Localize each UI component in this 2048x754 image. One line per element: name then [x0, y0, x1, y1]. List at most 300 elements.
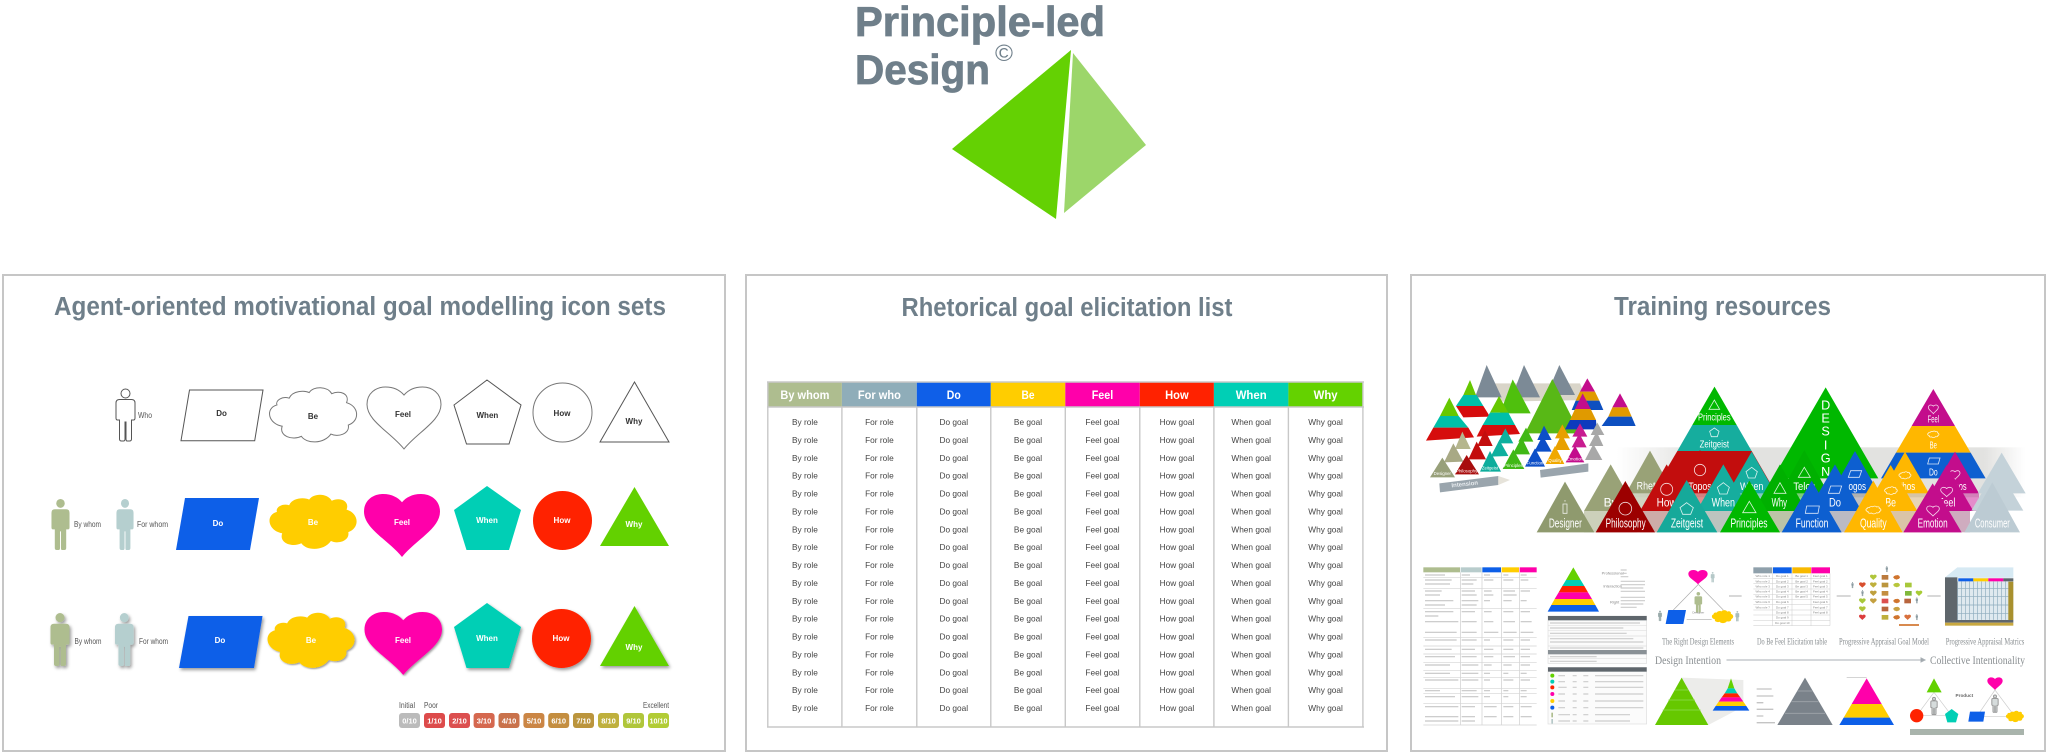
table body: Be goal	[1014, 685, 1042, 695]
front row pyramids: Principles	[1730, 516, 1768, 531]
appraisal scale legend: Initial	[399, 701, 415, 710]
thumbnail: do be feel pyramid	[1839, 677, 1894, 725]
table body: When goal	[1231, 632, 1271, 642]
table body: When goal	[1231, 488, 1271, 498]
table body: Feel goal	[1085, 632, 1120, 642]
table body: Do goal	[939, 506, 968, 516]
outline icon row: Feel	[395, 410, 411, 419]
thumbnail: do be feel table: Feel goal 4	[1813, 590, 1828, 594]
table body: How goal	[1160, 488, 1194, 498]
table body: How goal	[1160, 685, 1194, 695]
table body: By role	[792, 560, 818, 570]
thumbnail: do be feel table: Feel goal 5	[1813, 595, 1828, 599]
front mini row: Emotion	[1567, 456, 1584, 461]
shadowed colour icon row: For whom	[139, 637, 168, 646]
table body: For role	[865, 649, 894, 659]
backdrop	[1493, 383, 1587, 402]
table body: When goal	[1231, 417, 1271, 427]
big pyramid: design: E	[1821, 412, 1830, 426]
ground shadow	[1617, 447, 2025, 497]
front mini row: Designer	[1434, 471, 1452, 476]
table body: When goal	[1231, 614, 1271, 624]
table body: By role	[792, 703, 818, 713]
table body: Feel goal	[1085, 488, 1120, 498]
intension label bar	[1439, 476, 1510, 492]
front row pyramids: Quality	[1860, 516, 1887, 531]
table header row: How	[1165, 388, 1189, 402]
outline icon row	[116, 380, 669, 449]
table body: Why goal	[1308, 596, 1343, 606]
flat colour icon row: Feel	[394, 518, 410, 527]
table body: Do goal	[939, 488, 968, 498]
floor tints behind front row	[1584, 511, 1970, 532]
big pyramid: design: S	[1821, 425, 1830, 439]
table body: When goal	[1231, 560, 1271, 570]
front mini row: Philosophy	[1456, 468, 1478, 473]
big pyramid: principles zeitgeist topos: Zeitgeist	[1700, 439, 1729, 450]
table body: Feel goal	[1085, 667, 1120, 677]
thumbnail: do be feel table: Do goal 5	[1776, 595, 1789, 599]
table body: Why goal	[1308, 435, 1343, 445]
table body: For role	[865, 542, 894, 552]
table body: Be goal	[1014, 488, 1042, 498]
logo: Principle-led Design	[855, 0, 1146, 219]
table body: Be goal	[1014, 524, 1042, 534]
table header row: By whom	[780, 388, 829, 402]
table body: How goal	[1160, 667, 1194, 677]
front mini row: Function	[1527, 461, 1544, 466]
thumbnail: do be feel table: Do goal 10	[1775, 621, 1790, 625]
logo wordmark	[855, 0, 1105, 93]
front mini row: Quality	[1548, 458, 1563, 463]
table body: For role	[865, 632, 894, 642]
back row pyramids: Telos	[1793, 481, 1816, 493]
table body: For role	[865, 667, 894, 677]
table body: When goal	[1231, 506, 1271, 516]
shadowed colour icon row: Why	[626, 643, 643, 652]
table body: For role	[865, 685, 894, 695]
thumbnail: do be feel table: Feel goal 3	[1813, 584, 1828, 588]
big pyramid: principles zeitgeist topos: Principles	[1698, 413, 1731, 424]
table body: Feel goal	[1085, 649, 1120, 659]
table body: Why goal	[1308, 685, 1343, 695]
table body: By role	[792, 667, 818, 677]
table body: When goal	[1231, 542, 1271, 552]
big pyramid: design	[1773, 387, 1878, 479]
table body: Why goal	[1308, 560, 1343, 570]
table body: Why goal	[1308, 578, 1343, 588]
table body: When goal	[1231, 435, 1271, 445]
label: collective intentionality: Collective Intentionality	[1930, 653, 2025, 667]
big pyramid: design: N	[1821, 465, 1830, 479]
front row pyramids: Emotion	[1918, 516, 1948, 531]
flat colour icon row: Be	[308, 518, 319, 527]
thumbnail: do be feel table: Do goal 7	[1776, 605, 1789, 609]
table body: For role	[865, 596, 894, 606]
back row pyramids: Ethos	[1895, 481, 1916, 493]
thumbnail: do be feel table	[1753, 567, 1830, 626]
table header row: For who	[858, 388, 901, 402]
table body: Why goal	[1308, 417, 1343, 427]
flat colour icon row: When	[476, 516, 498, 525]
triad cloud and consumer	[1712, 610, 1739, 623]
table body: By role	[792, 614, 818, 624]
table body: Why goal	[1308, 614, 1343, 624]
thumbnail: goal model	[1851, 566, 1922, 626]
table body: By role	[792, 632, 818, 642]
big pyramid: feel be do: Be	[1930, 441, 1937, 452]
front mini row: Principles	[1504, 463, 1523, 468]
table body: Feel goal	[1085, 471, 1120, 481]
table body: When goal	[1231, 685, 1271, 695]
table body: Do goal	[939, 649, 968, 659]
thumbnail: right design elements triad	[1658, 570, 1723, 624]
magenta yellow blue pyramids	[1565, 378, 1636, 429]
thumbnail: do be feel table: Be goal 4	[1795, 590, 1808, 594]
table body: Do goal	[939, 417, 968, 427]
front row pyramids: Philosophy	[1606, 516, 1646, 531]
thumbnail: definitions table	[1548, 616, 1647, 663]
big pyramid: design: G	[1821, 452, 1831, 466]
back row pyramids: Topos	[1688, 481, 1712, 493]
table body: Why goal	[1308, 542, 1343, 552]
thumbnail: do be feel table: Do goal 8	[1776, 610, 1789, 614]
table body: Be goal	[1014, 578, 1042, 588]
front mini row	[1430, 444, 1602, 477]
table body: For role	[865, 417, 894, 427]
thumbnail: do be feel table: Do goal 6	[1776, 600, 1789, 604]
table body: By role	[792, 453, 818, 463]
thumbnail: do be feel table: Be goal 5	[1795, 595, 1808, 599]
logo wordmark: Design	[855, 46, 990, 93]
table body: By role	[792, 471, 818, 481]
table body: For role	[865, 471, 894, 481]
thumbnail: layered pyramid diagram: Right	[1610, 599, 1620, 604]
front row pyramids	[1537, 480, 2020, 532]
middle row pyramids: By	[1604, 496, 1618, 510]
panel heading: elicitation list: Rhetorical goal elicitation list	[902, 294, 1233, 322]
grey back pyramids	[1475, 365, 1575, 397]
thumbnail: progressive appraisal matrix	[1945, 567, 2013, 626]
thumbnail: do be feel table: Who role 5	[1755, 595, 1770, 599]
back row pyramids: Logos	[1844, 481, 1866, 493]
table body: How goal	[1160, 453, 1194, 463]
training thumbnails right column	[1712, 566, 2024, 735]
table body: Be goal	[1014, 471, 1042, 481]
flat colour icon row: Why	[626, 520, 643, 529]
table body: Feel goal	[1085, 614, 1120, 624]
table body: By role	[792, 488, 818, 498]
logo wordmark: ©	[995, 40, 1013, 66]
thumbnail: layered pyramid diagram: Professional	[1602, 571, 1624, 576]
outline icon row: When	[477, 411, 498, 420]
table body: By role	[792, 524, 818, 534]
thumbnail caption: the right design elements: The Right Design Elements	[1662, 638, 1734, 648]
appraisal scale legend: 4/10	[502, 716, 516, 726]
table body: How goal	[1160, 578, 1194, 588]
table body: Feel goal	[1085, 506, 1120, 516]
table body: When goal	[1231, 524, 1271, 534]
table header row	[768, 382, 1363, 407]
table body: For role	[865, 560, 894, 570]
table body: Feel goal	[1085, 685, 1120, 695]
table body: Feel goal	[1085, 453, 1120, 463]
table body: How goal	[1160, 506, 1194, 516]
process arrows	[1729, 595, 1941, 597]
table body: Why goal	[1308, 453, 1343, 463]
table body: Why goal	[1308, 488, 1343, 498]
table body: Do goal	[939, 471, 968, 481]
big pyramid: feel be do	[1881, 389, 1986, 478]
table body: How goal	[1160, 471, 1194, 481]
appraisal scale legend: 6/10	[551, 716, 566, 726]
panel heading: training resources: Training resources	[1614, 293, 1831, 321]
table body: Be goal	[1014, 453, 1042, 463]
thumbnail: layered pyramid diagram: Interaction	[1603, 583, 1622, 588]
table body: By role	[792, 596, 818, 606]
table body: By role	[792, 542, 818, 552]
table body: Why goal	[1308, 632, 1343, 642]
table body: Be goal	[1014, 560, 1042, 570]
table body: Do goal	[939, 453, 968, 463]
shadowed colour icon row: Do	[215, 636, 225, 645]
table body: Why goal	[1308, 506, 1343, 516]
table body: Feel goal	[1085, 524, 1120, 534]
shadowed colour icon row	[50, 603, 669, 675]
thumbnail: do be feel table: Do goal 4	[1776, 590, 1789, 594]
thumbnail: do be feel table: Feel goal 1	[1813, 574, 1828, 578]
table body: When goal	[1231, 649, 1271, 659]
appraisal scale legend: 10/10	[650, 716, 668, 726]
thumbnail: do be feel table: Be goal 2	[1795, 579, 1808, 583]
table body: Be goal	[1014, 614, 1042, 624]
large design element pyramids	[1537, 387, 2026, 532]
thumbnail: do be feel table: Do goal 2	[1776, 579, 1789, 583]
table header row: Why	[1314, 388, 1338, 402]
table body: Why goal	[1308, 524, 1343, 534]
big pyramid: design: D	[1821, 398, 1830, 412]
table body: Feel goal	[1085, 542, 1120, 552]
appraisal scale legend: Poor	[424, 701, 438, 710]
table body: For role	[865, 614, 894, 624]
middle row pyramids	[1584, 464, 2023, 511]
table body: By role	[792, 506, 818, 516]
table body: By role	[792, 417, 818, 427]
thumbnail: product triads	[1910, 677, 2024, 722]
flat colour icon row: Do	[213, 519, 223, 528]
front row pyramids: Consumer	[1975, 516, 2010, 531]
thumbnail: do be feel table: Feel goal 6	[1813, 600, 1828, 604]
arrow: intention to intentionality	[1726, 658, 1925, 662]
table body: For role	[865, 453, 894, 463]
middle row pyramids: How	[1657, 496, 1677, 510]
table body: For role	[865, 578, 894, 588]
thumbnail: do be feel table: Be goal 3	[1795, 584, 1808, 588]
flat colour icon row	[51, 486, 669, 557]
table body: Feel goal	[1085, 435, 1120, 445]
appraisal scale legend: Excellent	[643, 701, 670, 710]
table body: How goal	[1160, 435, 1194, 445]
thumbnail: do be feel table: Who role 1	[1755, 574, 1770, 578]
small pyramid models cluster	[1426, 365, 1636, 492]
table body: By role	[792, 435, 818, 445]
second mini row	[1444, 432, 1603, 462]
table body	[792, 417, 1343, 713]
panel: rhetorical goal elicitation list	[746, 275, 1387, 751]
table body: Do goal	[939, 560, 968, 570]
thumbnail: colour pyramid projection	[1713, 678, 1749, 711]
table body: When goal	[1231, 471, 1271, 481]
table body: For role	[865, 703, 894, 713]
table body: Why goal	[1308, 649, 1343, 659]
appraisal scale legend: 8/10	[601, 716, 616, 726]
thumbnail: footer bar	[1910, 729, 2024, 735]
thumbnail: do be feel table: Who role 7	[1755, 605, 1770, 609]
collective label bar	[1540, 463, 1588, 478]
thumbnail: product triads: Product	[1956, 693, 1974, 698]
front mini row: Zeitgeist	[1482, 466, 1499, 471]
outline icon row: Do	[216, 409, 227, 418]
appraisal scale legend: 9/10	[626, 716, 641, 726]
table body: How goal	[1160, 560, 1194, 570]
appraisal scale legend: 0/10	[402, 716, 417, 726]
table body: How goal	[1160, 596, 1194, 606]
table header row: When	[1236, 388, 1267, 402]
table body: Do goal	[939, 685, 968, 695]
table body: Be goal	[1014, 506, 1042, 516]
label: design intention: Design Intention	[1655, 653, 1721, 667]
table header row: Be	[1022, 388, 1035, 402]
table body: Why goal	[1308, 703, 1343, 713]
middle row pyramids: Be	[1885, 496, 1896, 510]
table body: Do goal	[939, 578, 968, 588]
table body: Be goal	[1014, 435, 1042, 445]
table body: Be goal	[1014, 649, 1042, 659]
thumbnail: do be feel table: Who role 4	[1755, 590, 1770, 594]
flat colour icon row: For whom	[137, 520, 168, 529]
thumbnail: green pyramid	[1655, 678, 1743, 725]
thumbnail: do be feel table: Who role 6	[1755, 600, 1770, 604]
floor tints behind middle row	[1626, 493, 1979, 511]
table body: Do goal	[939, 435, 968, 445]
thumbnail: grey pyramid	[1757, 678, 1833, 725]
appraisal scale legend: 5/10	[527, 716, 541, 726]
table body: Be goal	[1014, 596, 1042, 606]
middle row pyramids: When	[1712, 496, 1735, 510]
shadowed colour icon row: By whom	[74, 637, 102, 646]
table body: Feel goal	[1085, 596, 1120, 606]
table body: Be goal	[1014, 542, 1042, 552]
shadowed colour icon row: Feel	[395, 636, 411, 645]
appraisal scale legend: 7/10	[576, 716, 591, 726]
table body: When goal	[1231, 453, 1271, 463]
intension label bar: Intension	[1451, 481, 1479, 489]
shadowed colour icon row: Be	[306, 636, 317, 645]
elicitation table	[767, 382, 1364, 727]
thumbnail: elicitation table	[1423, 567, 1537, 725]
shadowed colour icon row: When	[476, 634, 498, 643]
table body: Do goal	[939, 703, 968, 713]
thumbnail: do be feel table: Who role 2	[1755, 579, 1770, 583]
table body: How goal	[1160, 703, 1194, 713]
back row pyramids: Pathos	[1943, 481, 1967, 493]
table body: By role	[792, 578, 818, 588]
front row pyramids: Function	[1796, 516, 1828, 531]
table body: Be goal	[1014, 632, 1042, 642]
thumbnail: do be feel table: Do goal 3	[1776, 584, 1789, 588]
thumbnail: do be feel table: Do goal 1	[1776, 574, 1789, 578]
big pyramid: principles zeitgeist topos	[1656, 387, 1772, 487]
big pyramid: feel be do: Feel	[1928, 415, 1939, 426]
table body: Be goal	[1014, 667, 1042, 677]
table body: How goal	[1160, 417, 1194, 427]
flat colour icon row: How	[554, 516, 571, 525]
table body: By role	[792, 649, 818, 659]
front row pyramids: Designer	[1549, 516, 1582, 531]
training thumbnails left column	[1423, 567, 1743, 725]
table header row: Feel	[1092, 388, 1113, 402]
thumbnail caption: goal model: Progressive Appraisal Goal Model	[1839, 638, 1929, 648]
appraisal scale legend: 1/10	[427, 716, 442, 726]
panel: training resources	[1411, 275, 2045, 751]
table body: How goal	[1160, 542, 1194, 552]
thumbnail: do be feel table: Be goal 1	[1795, 574, 1808, 578]
table body: For role	[865, 488, 894, 498]
table body: When goal	[1231, 596, 1271, 606]
back row pyramids: Rhetor	[1637, 480, 1663, 492]
outline icon row: How	[554, 409, 571, 418]
table body: Do goal	[939, 596, 968, 606]
table body: When goal	[1231, 703, 1271, 713]
panel heading: icon sets: Agent-oriented motivational goal modelling icon sets	[54, 293, 666, 321]
table body: Do goal	[939, 542, 968, 552]
table body: Be goal	[1014, 417, 1042, 427]
thumbnail: element colour table	[1548, 667, 1647, 724]
table body: For role	[865, 524, 894, 534]
outline icon row: Who	[138, 411, 152, 420]
appraisal scale legend	[399, 701, 670, 728]
thumbnail: do be feel table: Do goal 9	[1776, 616, 1789, 620]
thumbnail: right design elements triad: Designer	[1692, 610, 1704, 614]
table body: How goal	[1160, 632, 1194, 642]
table body: Feel goal	[1085, 578, 1120, 588]
table body: Do goal	[939, 524, 968, 534]
table body: How goal	[1160, 649, 1194, 659]
outline icon row: Why	[626, 417, 643, 426]
table body: Do goal	[939, 614, 968, 624]
table body: Do goal	[939, 632, 968, 642]
thumbnail: do be feel table: Feel goal 2	[1813, 579, 1828, 583]
big pyramid: feel be do: Do	[1929, 467, 1938, 478]
table body: Feel goal	[1085, 560, 1120, 570]
table body: Do goal	[939, 667, 968, 677]
back row pyramids: When	[1740, 481, 1763, 493]
middle row pyramids: Do	[1829, 496, 1841, 510]
flat colour icon row: By whom	[74, 520, 101, 529]
table body: Why goal	[1308, 667, 1343, 677]
front row pyramids: Zeitgeist	[1671, 516, 1703, 531]
table body: When goal	[1231, 667, 1271, 677]
appraisal scale legend: 2/10	[452, 716, 467, 726]
back row pyramids	[1626, 450, 2026, 493]
thumbnail: do be feel table: Feel goal 8	[1813, 610, 1828, 614]
table body: How goal	[1160, 524, 1194, 534]
third mini row	[1455, 423, 1604, 449]
table body: By role	[792, 685, 818, 695]
middle row pyramids: Why	[1772, 496, 1787, 510]
thumbnail: do be feel table: Feel goal 7	[1813, 605, 1828, 609]
outline icon row: Be	[308, 412, 319, 421]
